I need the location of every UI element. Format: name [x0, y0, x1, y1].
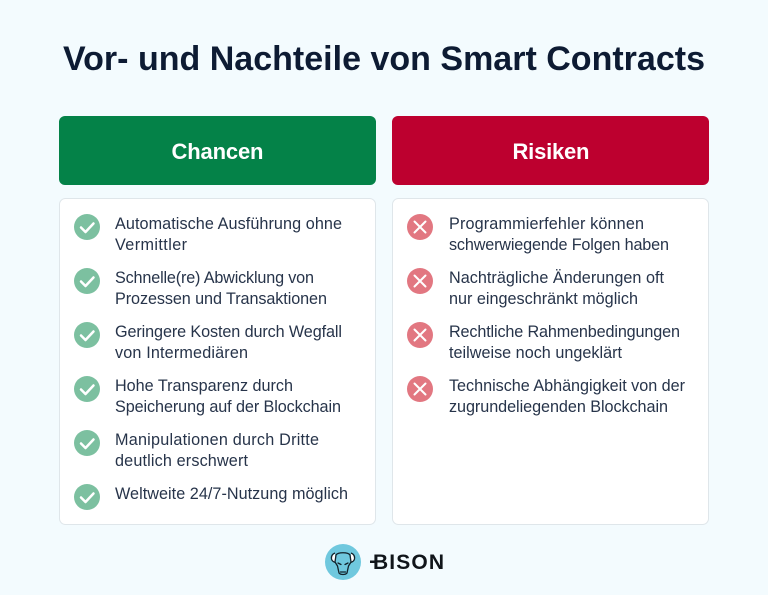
item: Geringere Kosten: von Intermediären: [115, 344, 248, 362]
item: Programmierfehler: [407, 214, 669, 254]
item: Schnelle Abwicklung: Schnelle(re) Abwicklung von: [115, 269, 314, 287]
wordmark: BISON: BISON: [373, 551, 444, 574]
item: Hohe Transparenz: [74, 376, 341, 416]
item: Automatische Ausführung: Automatische Ausführung ohne: [115, 215, 342, 233]
item: Nachträgliche Änderungen: nur eingeschränkt möglich: [449, 290, 638, 308]
item: Schnelle Abwicklung: Prozessen und Transaktionen: [115, 290, 327, 308]
card: Chancen list: [60, 198, 376, 524]
item: Technische Abhängigkeit: zugrundeliegenden Blockchain: [449, 398, 668, 416]
heading: Chancen: Chancen: [172, 139, 264, 164]
item: Weltweite Nutzung: [74, 484, 348, 510]
item: Geringere Kosten: Geringere Kosten durch Wegfall: [115, 323, 342, 341]
item: Technische Abhängigkeit: Technische Abhängigkeit von der: [449, 377, 686, 395]
item: Programmierfehler: schwerwiegende Folgen haben: [449, 236, 669, 254]
heading: Risiken: [392, 116, 709, 185]
item: Programmierfehler: Programmierfehler können: [449, 215, 644, 233]
card: Risiken list: [392, 198, 708, 524]
item: Weltweite Nutzung: Weltweite 24/7-Nutzung möglich: [115, 485, 348, 503]
item: Manipulationen: Manipulationen durch Dritte: [115, 431, 319, 449]
icon: bison head: [325, 544, 361, 580]
heading: Risiken: Risiken: [512, 139, 590, 164]
item: Automatische Ausführung: Vermittler: [115, 236, 188, 254]
item: Hohe Transparenz: Speicherung auf der Blockchain: [115, 398, 341, 416]
panel: Chancen: [59, 116, 376, 524]
item: Rechtliche Rahmenbedingungen: teilweise noch ungeklärt: [449, 344, 622, 362]
logo: BISON: [325, 544, 444, 580]
item: Nachträgliche Änderungen: [407, 268, 664, 308]
title: Vor- und Nachteile von Smart Contracts: [63, 40, 705, 78]
item: Rechtliche Rahmenbedingungen: Rechtliche Rahmenbedingungen: [449, 323, 680, 341]
item: Rechtliche Rahmenbedingungen: [407, 322, 680, 362]
item: Manipulationen: deutlich erschwert: [115, 452, 248, 470]
item: Schnelle Abwicklung: [74, 268, 327, 308]
item: Geringere Kosten: [74, 322, 342, 362]
item: Nachträgliche Änderungen: Nachträgliche Änderungen oft: [449, 269, 664, 287]
item: Automatische Ausführung: [74, 214, 342, 254]
heading: Chancen: [59, 116, 376, 185]
item: Technische Abhängigkeit: [407, 376, 686, 416]
item: Manipulationen: [74, 430, 319, 470]
panel: Risiken: [392, 116, 709, 524]
item: Hohe Transparenz: Hohe Transparenz durch: [115, 377, 293, 395]
